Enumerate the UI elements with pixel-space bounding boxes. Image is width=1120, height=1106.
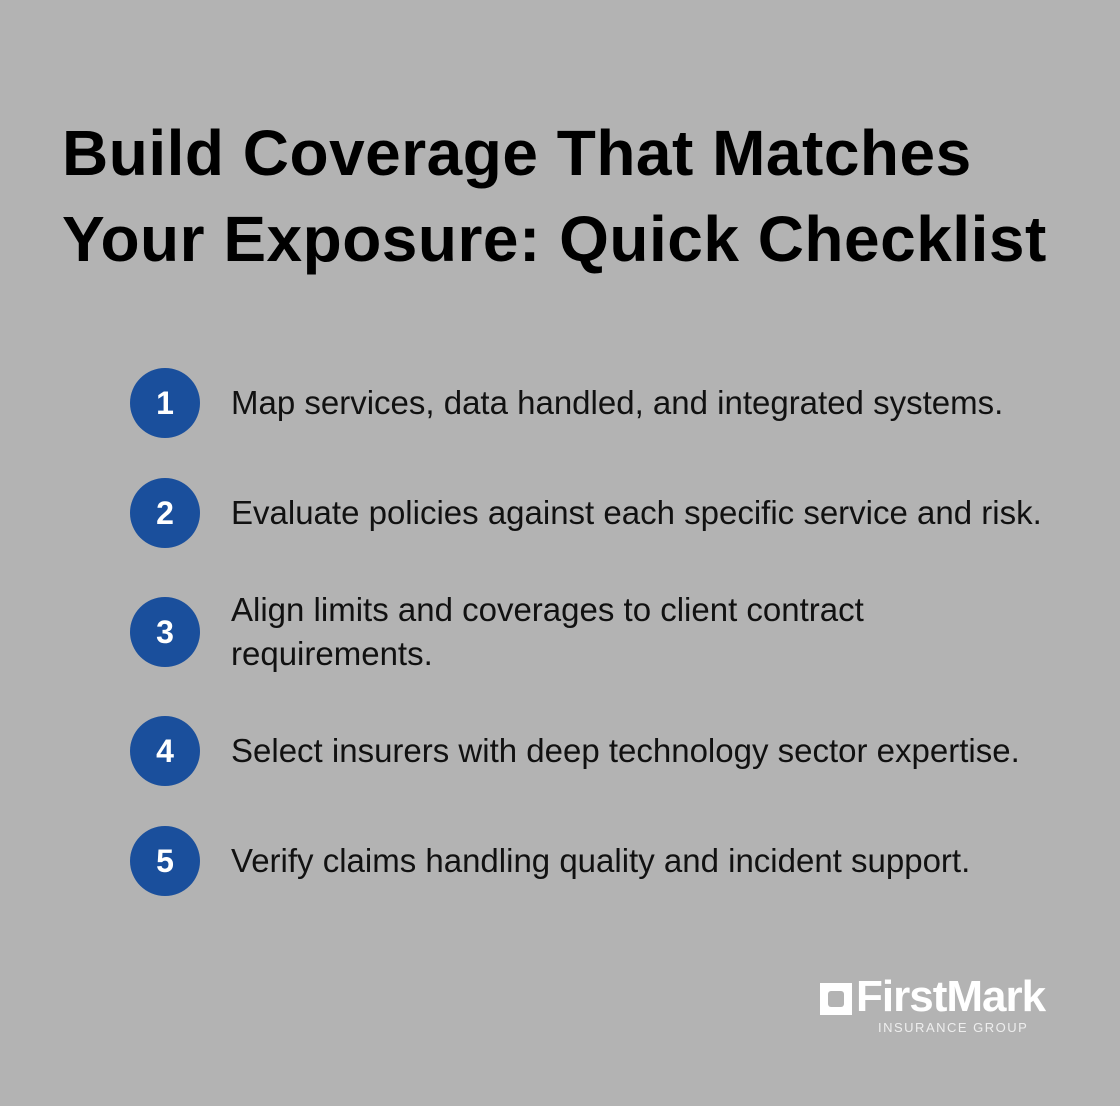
item 4: Select insurers with deep technology sector expertise. [231, 732, 1020, 769]
item 3: 3 [156, 614, 174, 650]
item 2: Evaluate policies against each specific service and risk. [231, 494, 1042, 531]
title: Build Coverage That Matches [62, 117, 972, 189]
item 5: 5 [156, 843, 174, 879]
item 2: 2 [156, 495, 174, 531]
item 1: 1 [156, 385, 174, 421]
logo: FirstMark [856, 972, 1045, 1021]
logo [820, 972, 1046, 1035]
title [62, 117, 1047, 275]
title: Your Exposure: Quick Checklist [62, 203, 1047, 275]
item 4: 4 [156, 733, 174, 769]
item 4 [130, 716, 1020, 786]
item 1 [130, 368, 1003, 438]
item 5: Verify claims handling quality and incident support. [231, 842, 970, 879]
logo: INSURANCE GROUP [878, 1020, 1028, 1035]
item 2 [130, 478, 1042, 548]
item 1: Map services, data handled, and integrated systems. [231, 384, 1003, 421]
item 5 [130, 826, 970, 896]
item 3: Align limits and coverages to client contract requirements. [231, 591, 864, 672]
